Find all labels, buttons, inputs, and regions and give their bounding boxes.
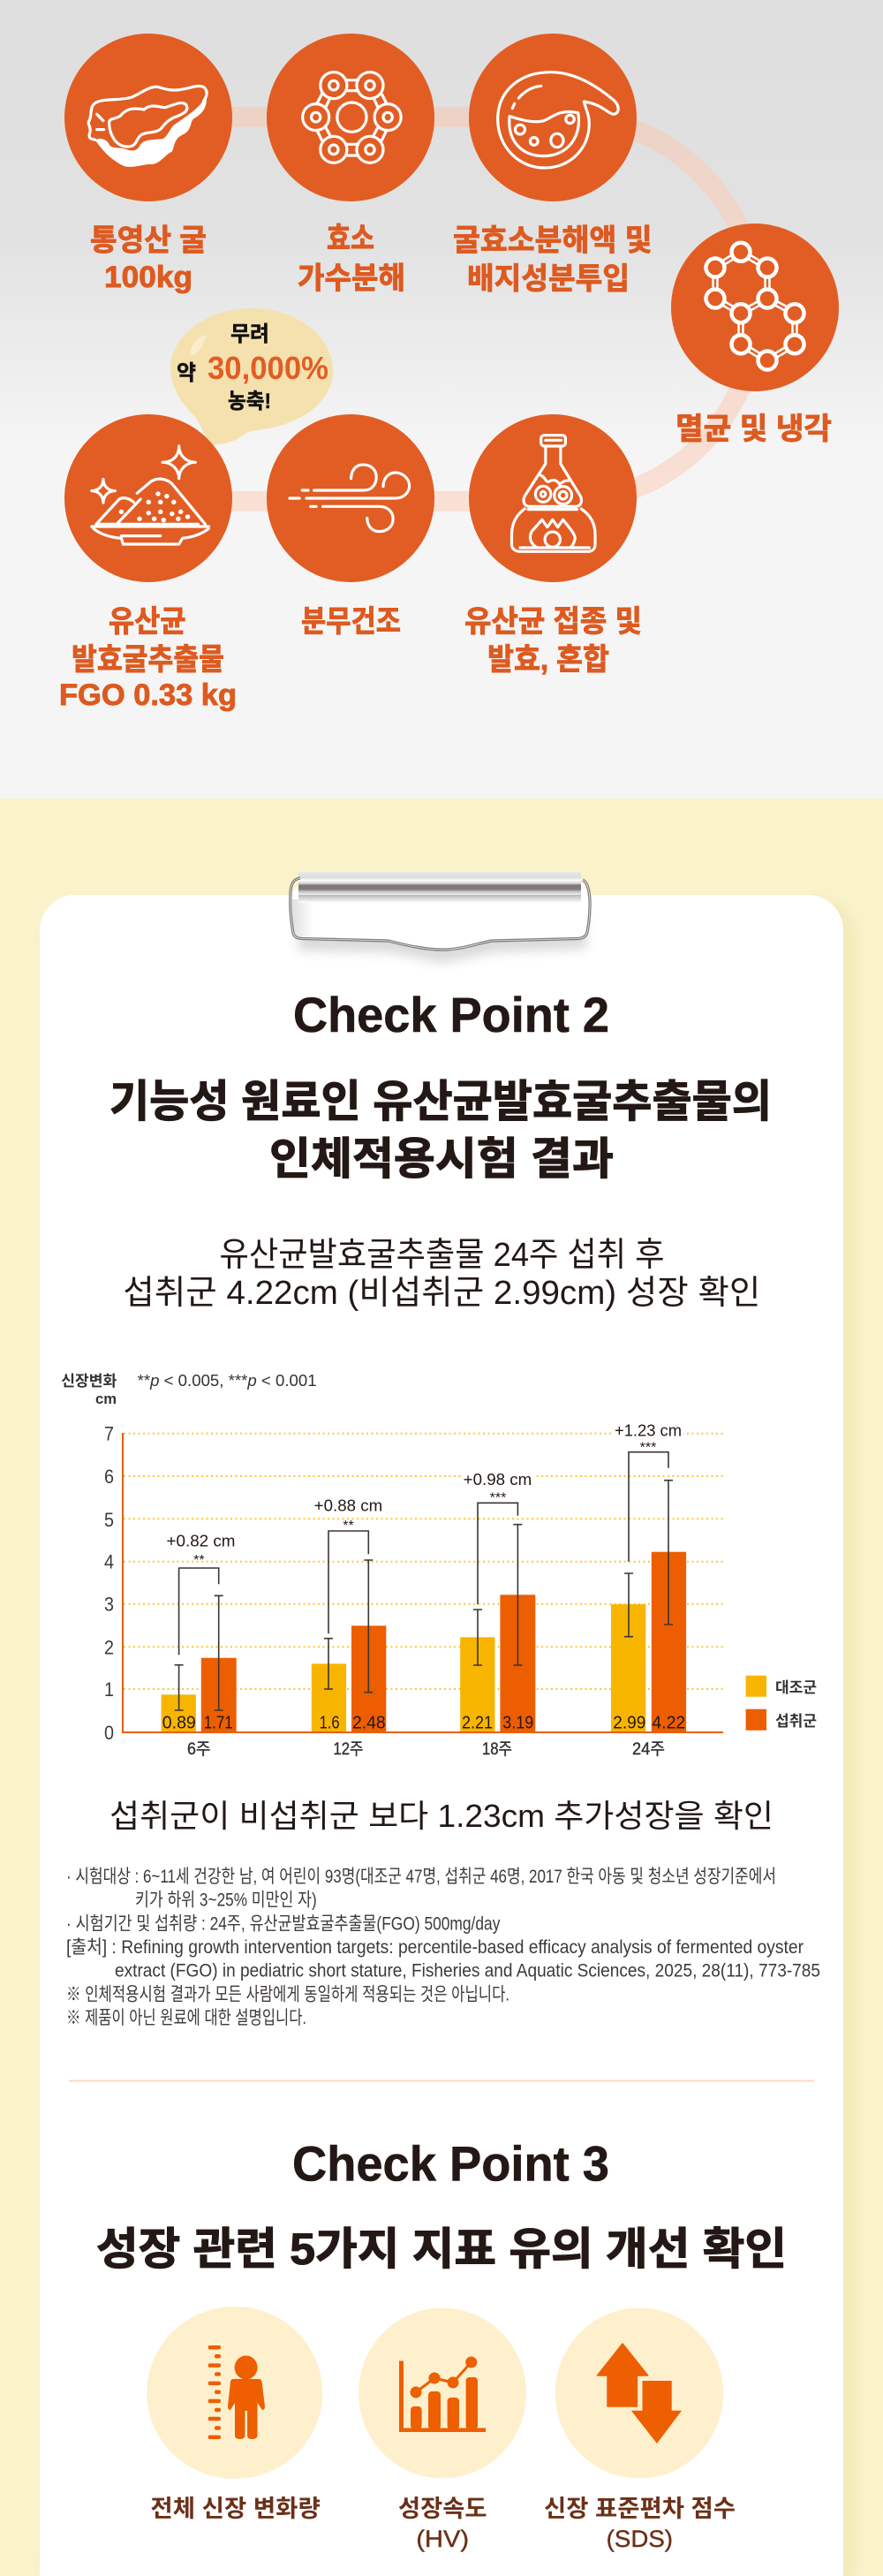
heading: clinical trial result: [109, 1077, 772, 1184]
label: growth velocity: 성장속도: [398, 2496, 487, 2522]
difference labels: **: [193, 1553, 205, 1568]
icon: oyster: [88, 86, 207, 167]
chart header: **p < 0.005, ***p < 0.001: [138, 1372, 317, 1390]
y axis: 7: [104, 1422, 114, 1445]
heading: five indicators: 성장 관련 5가지 지표 유의 개선 확인: [96, 2224, 787, 2274]
label: FGO extract: [59, 605, 237, 712]
bar value labels: 1.71: [204, 1714, 233, 1733]
icon: flask on burner: [512, 436, 595, 551]
x axis labels: [187, 1740, 665, 1759]
difference labels: +0.98 cm: [464, 1471, 532, 1489]
bar value labels: [162, 1714, 685, 1733]
grid lines: [124, 1424, 723, 1689]
label: inoculation and fermentation: [464, 605, 642, 677]
difference labels: ***: [640, 1441, 656, 1456]
chart header: cm: [95, 1390, 117, 1407]
label: total height change: 전체 신장 변화량: [150, 2496, 321, 2522]
label: sterilise and cool: 멸균 및 냉각: [675, 413, 832, 446]
icon: round flask: [498, 72, 618, 168]
step: sterilise and cool: [671, 224, 839, 446]
difference labels: ***: [490, 1491, 506, 1506]
label: height SDS: [544, 2496, 736, 2552]
label: oyster: 100kg: [104, 261, 192, 294]
label: enzyme hydrolysis: 효소: [327, 223, 374, 256]
y axis: 0: [104, 1722, 114, 1744]
text block: growth summary: 섭취군 4.22cm (비섭취군 2.99cm) 성장 확인: [123, 1275, 760, 1312]
label: hydrolysate and medium: [453, 224, 652, 296]
bar value labels: 0.89: [162, 1714, 196, 1733]
label: hydrolysate and medium: 배지성분투입: [467, 262, 630, 296]
difference labels: +0.82 cm: [166, 1533, 235, 1550]
bar value labels: 1.6: [320, 1714, 340, 1733]
label: enzyme hydrolysis: 가수분해: [298, 261, 405, 295]
bars: intake group: [201, 1552, 686, 1731]
bar value labels: 4.22: [652, 1714, 685, 1733]
text block: growth summary: [123, 1237, 760, 1312]
difference labels: +1.23 cm: [615, 1421, 682, 1439]
bars: control group: [162, 1604, 645, 1731]
legend: 대조군: [775, 1679, 817, 1696]
x axis labels: 12주: [333, 1740, 363, 1759]
label: hydrolysate and medium: 굴효소분해액 및: [453, 224, 652, 258]
heading: clinical trial result: 인체적용시험 결과: [269, 1134, 614, 1184]
y axis: 2: [104, 1636, 114, 1659]
legend: 섭취군: [775, 1713, 817, 1730]
bar value labels: 2.48: [352, 1714, 386, 1733]
label: inoculation and fermentation: 발효, 혼합: [487, 643, 609, 677]
indicator: total height change: [147, 2307, 322, 2522]
title: Check Point 3: Check Point 3: [292, 2136, 609, 2192]
indicator: height SDS: [544, 2307, 736, 2552]
label: height SDS: (SDS): [607, 2526, 673, 2552]
icon: wind: [290, 465, 410, 532]
label: height SDS: 신장 표준편차 점수: [544, 2496, 736, 2522]
text block: study notes: [출처] : Refining growth intervention targets: percentile-based efficacy analysis of fermented oyster: [66, 1937, 804, 1958]
difference labels: +0.88 cm: [314, 1497, 382, 1515]
significance brackets: [179, 1452, 668, 1655]
x axis labels: 24주: [632, 1740, 665, 1759]
x axis labels: 6주: [187, 1740, 210, 1759]
callout: 30,000% concentration: 약: [177, 361, 196, 385]
text block: study notes: 키가 하위 3~25% 미만인 자): [135, 1890, 317, 1911]
chart header: 신장변화: [61, 1373, 117, 1390]
icon: person with ruler: [208, 2345, 265, 2439]
label: FGO extract: 유산균: [109, 605, 185, 639]
bar value labels: 3.19: [502, 1714, 533, 1733]
legend: [746, 1676, 817, 1731]
label: growth velocity: (HV): [416, 2526, 469, 2552]
panel: white clipboard card: [40, 895, 843, 2576]
process connector ring: [148, 117, 758, 502]
card shadow: [46, 901, 854, 2576]
text block: study notes: ※ 인체적용시험 결과가 모든 사람에게 동일하게 적용되는 것은 아닙니다.: [66, 1985, 509, 2005]
icon: enzyme ring: [303, 72, 401, 163]
callout: 30,000% concentration: [170, 308, 333, 445]
label: FGO extract: FGO 0.33 kg: [59, 678, 237, 712]
y axis: 6: [104, 1466, 114, 1488]
bar value labels: 2.99: [613, 1714, 645, 1733]
text block: study notes: extract (FGO) in pediatric short stature, Fisheries and Aquatic Sciences, 2025, 28(11), 773-785: [115, 1961, 820, 1981]
text block: study notes: ※ 제품이 아닌 원료에 대한 설명입니다.: [66, 2008, 306, 2028]
panel: process background: [0, 0, 883, 799]
difference labels: **: [343, 1519, 354, 1534]
step: FGO extract: [59, 414, 237, 712]
callout: 30,000% concentration: 30,000%: [208, 350, 328, 386]
callout: 30,000% concentration: 농축!: [228, 390, 271, 413]
chart header: [61, 1372, 317, 1407]
bar chart: height change: [61, 1372, 817, 1759]
icon: molecule: [706, 243, 804, 369]
y axis: 4: [104, 1551, 114, 1572]
indicator: growth velocity: [358, 2307, 526, 2552]
label: FGO extract: 발효굴추출물: [72, 643, 224, 677]
icon: up and down arrows: [597, 2344, 682, 2443]
step: inoculation and fermentation: [464, 414, 642, 677]
bar value labels: 2.21: [462, 1714, 493, 1733]
y axis: 1: [104, 1678, 114, 1701]
y axis: [104, 1422, 723, 1744]
text block: study notes: · 시험기간 및 섭취량 : 24주, 유산균발효굴추출물(FGO) 500mg/day: [66, 1914, 501, 1935]
x axis labels: 18주: [482, 1740, 512, 1759]
error bars: [175, 1481, 673, 1710]
label: growth velocity: [398, 2496, 487, 2552]
label: enzyme hydrolysis: [298, 223, 405, 295]
step: spray drying: [267, 414, 434, 639]
label: spray drying: 분무건조: [301, 605, 401, 639]
label: oyster: [90, 224, 207, 294]
icon: metal clipboard clip: [291, 872, 590, 963]
label: inoculation and fermentation: 유산균 접종 및: [464, 605, 642, 639]
difference labels: [166, 1421, 682, 1568]
icon: growth chart: [399, 2357, 486, 2432]
y axis: 3: [104, 1594, 114, 1615]
step: enzyme hydrolysis: [267, 34, 434, 295]
y axis: 5: [104, 1509, 114, 1531]
heading: clinical trial result: 기능성 원료인 유산균발효굴추출물의: [109, 1077, 772, 1126]
text block: study notes: [66, 1867, 820, 2028]
panel: cream background: [0, 799, 883, 2576]
step: hydrolysate and medium: [453, 34, 652, 296]
callout: 30,000% concentration: 무려: [230, 322, 269, 346]
icon: powder plate: [92, 446, 208, 544]
step: oyster: [64, 34, 232, 294]
text block: additional growth: 섭취군이 비섭취군 보다 1.23cm 추가성장을 확인: [109, 1798, 774, 1834]
title: Check Point 2: Check Point 2: [293, 987, 609, 1042]
text block: growth summary: 유산균발효굴추출물 24주 섭취 후: [219, 1237, 664, 1274]
label: oyster: 통영산 굴: [90, 224, 207, 258]
